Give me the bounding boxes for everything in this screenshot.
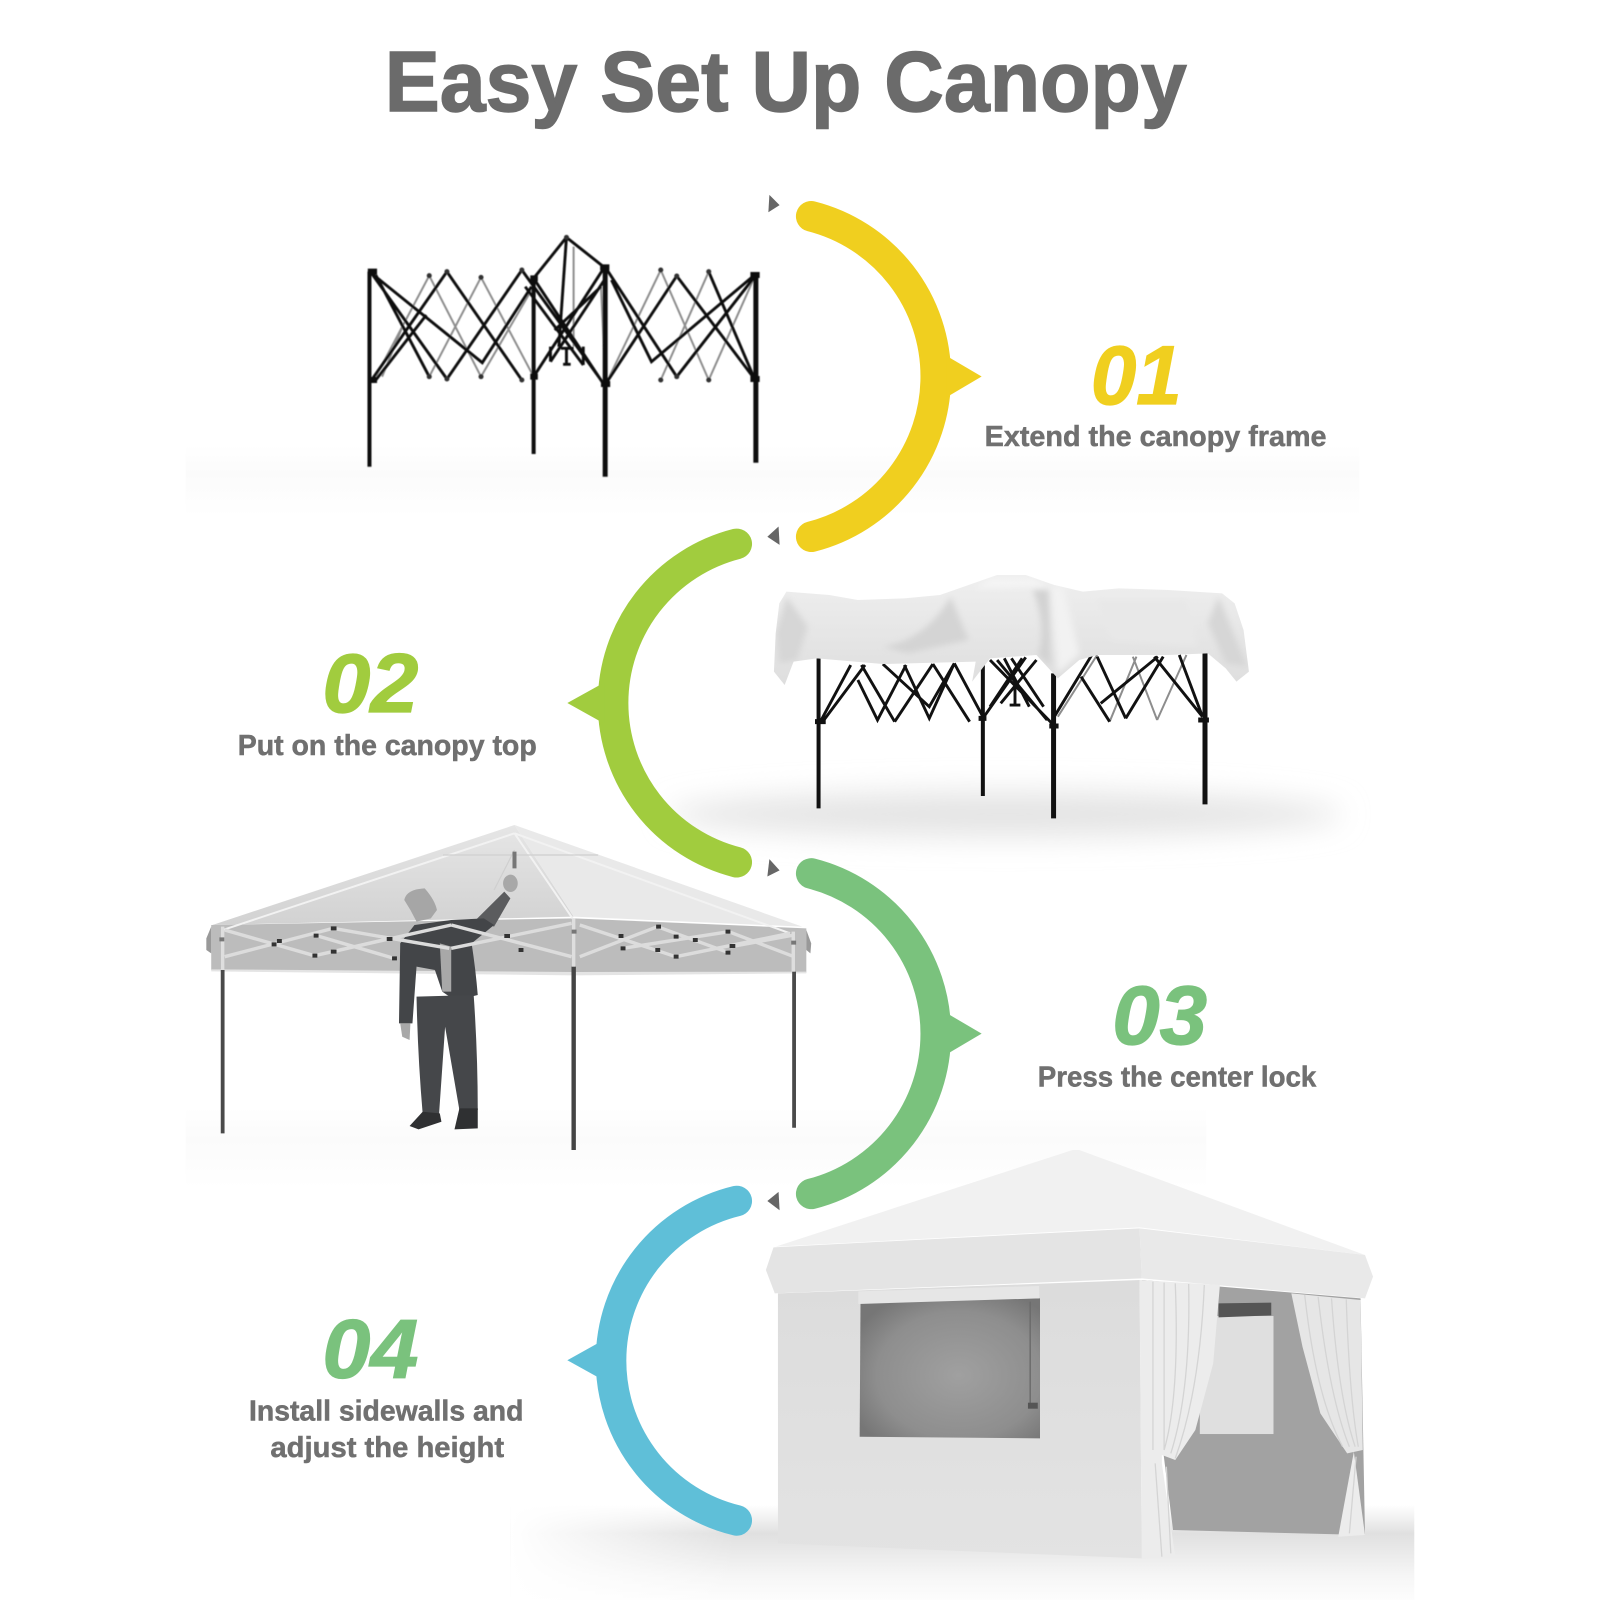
caption 02: Put on the canopy top: [238, 730, 537, 762]
trousers: [417, 995, 478, 1115]
frame truss and legs: [368, 237, 760, 477]
number 02: 02: [322, 636, 418, 730]
person: [399, 875, 518, 1129]
step 2 arc: lime: [567, 544, 737, 862]
small arrow: top of step 1: [768, 195, 780, 212]
step 3 panel: person pressing center lock under canopy: [206, 825, 811, 1150]
caption 04: Install sidewalls and: [249, 1395, 523, 1427]
number 01: 01: [1091, 328, 1182, 422]
step 4 panel: canopy with sidewalls: [766, 1150, 1373, 1558]
legs: [223, 970, 794, 1133]
left wall: [778, 1280, 1142, 1558]
number 04: 04: [322, 1302, 418, 1396]
roof left face: [212, 825, 574, 925]
ground haze: step 1: [186, 445, 1359, 516]
valance: [211, 918, 806, 973]
roof top: [776, 1150, 1365, 1255]
small arrow: step 3 to 4: [767, 1192, 780, 1210]
caption 03: Press the center lock: [1038, 1062, 1316, 1094]
step 4 label: [249, 1302, 523, 1464]
arrowhead: yellow: [947, 356, 982, 397]
arrowhead: blue: [567, 1340, 604, 1381]
head: [404, 888, 437, 922]
step 2 panel: frame with draped canopy top: [774, 575, 1249, 818]
draped canopy cloth: [774, 575, 1249, 685]
curtain left: [1140, 1280, 1220, 1558]
valance right: [1140, 1228, 1373, 1298]
ground haze: step 3: [186, 1107, 1206, 1189]
step 1 panel: canopy frame: [368, 237, 760, 477]
curtain right lower: [1338, 1452, 1365, 1537]
roof right face: [514, 825, 802, 927]
arrowhead: green: [947, 1013, 982, 1054]
jacket: [399, 918, 494, 1023]
title: Easy Set Up Canopy: [385, 34, 1187, 130]
step 1 label: [985, 328, 1327, 453]
small arrow: step 1 to 2: [767, 527, 780, 545]
cloth folds: [776, 589, 1243, 670]
window: [860, 1298, 1040, 1438]
step 3 label: [1038, 968, 1316, 1094]
truss: [225, 923, 794, 958]
step 2 label: [238, 636, 537, 762]
caption 01: Extend the canopy frame: [985, 421, 1327, 453]
shoes: [410, 1112, 441, 1129]
caption 04 second line: adjust the height: [270, 1432, 505, 1464]
inner window: [1200, 1316, 1273, 1434]
curtain right: [1291, 1293, 1363, 1453]
window roller: [858, 1286, 1039, 1304]
step 2 ground shadow: [668, 792, 1342, 837]
valance left: [766, 1228, 1142, 1293]
interior: [1142, 1280, 1365, 1535]
step 4 ground shadow: [510, 1505, 1414, 1600]
step 4 arc: blue: [567, 1201, 737, 1520]
arrowhead: lime: [567, 683, 604, 723]
arm and hand: [476, 892, 510, 927]
step 3 arc: green: [811, 873, 982, 1194]
small arrow: step 2 to 3: [767, 859, 780, 877]
step 1 arc: yellow: [811, 216, 982, 537]
number 03: 03: [1112, 968, 1207, 1062]
inner roller: [1219, 1303, 1271, 1317]
